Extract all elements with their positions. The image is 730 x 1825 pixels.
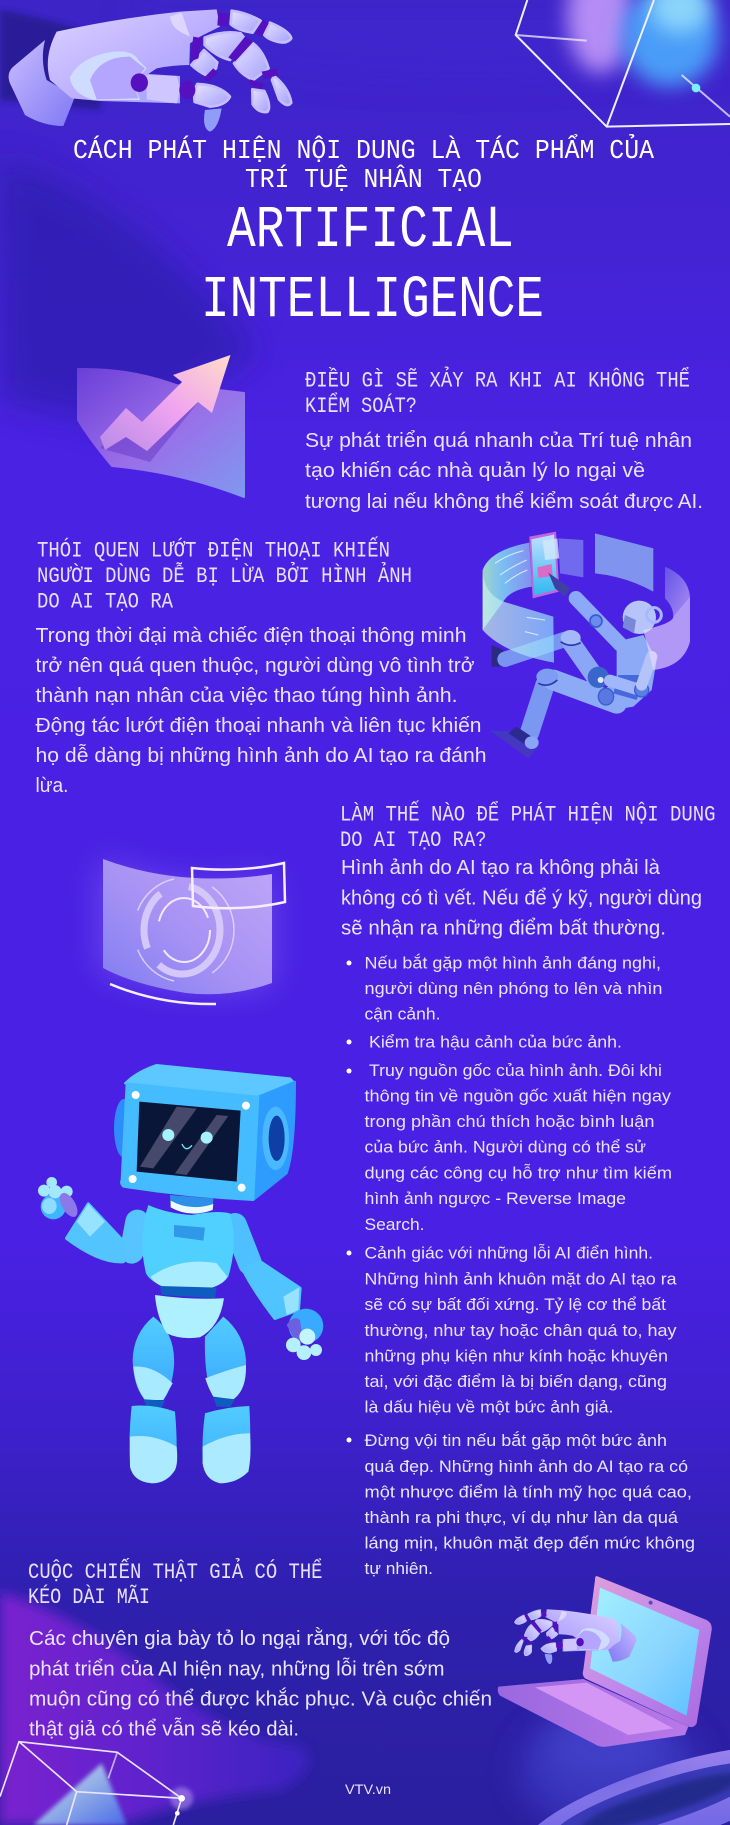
heading: DO AI TẠO RA: [37, 590, 174, 614]
bullet 3: Truy nguồn gốc của hình ảnh. Đôi khi: [369, 1062, 662, 1080]
bullet 5: thành ra phi thực, ví dụ như làn da quá: [364, 1509, 679, 1527]
text block: thật giả có thể vẫn sẽ kéo dài.: [29, 1718, 299, 1740]
icon: rising chart panel: [78, 355, 244, 497]
heading: [340, 800, 716, 853]
bullet 3: hình ảnh ngược - Reverse Image: [364, 1190, 626, 1208]
text block: Sự phát triển quá nhanh của Trí tuệ nhân: [305, 430, 692, 452]
bullet 1: [346, 954, 662, 1024]
text block: Hình ảnh do AI tạo ra không phải là: [341, 857, 661, 879]
icon: holographic screen with rings: [100, 859, 285, 1004]
section: how to detect AI content: [340, 800, 716, 1578]
bullet 2: Kiểm tra hậu cảnh của bức ảnh.: [369, 1034, 622, 1052]
text block: [305, 430, 703, 513]
bullet 4: sẽ có sự bất đối xứng. Tỷ lệ cơ thể bất: [364, 1296, 666, 1314]
text block: họ dễ dàng bị những hình ảnh do AI tạo ra đánh: [36, 744, 486, 767]
text block: trở nên quá quen thuộc, người dùng vô tình trở: [36, 655, 475, 677]
text block: tạo khiến các nhà quản lý lo ngại về: [305, 460, 645, 482]
heading: [305, 366, 690, 419]
bullet 3: dụng các công cụ hỗ trợ như tìm kiếm: [364, 1164, 672, 1182]
heading: KIỂM SOÁT?: [305, 392, 417, 419]
bullet 5: [346, 1431, 695, 1578]
bullet list: [346, 954, 695, 1578]
bullet 4: tai, với đặc điểm là bị biến dạng, cũng: [364, 1373, 667, 1391]
section: endless war of real and fake: [28, 1558, 492, 1740]
section: phone scrolling habit: [36, 536, 486, 797]
bullet 1: Nếu bắt gặp một hình ảnh đáng nghi,: [364, 954, 661, 972]
heading: [28, 1558, 322, 1610]
bullet 5: Đừng vội tin nếu bắt gặp một bức ảnh: [364, 1431, 667, 1450]
title: INTELLIGENCE: [201, 267, 544, 334]
decoration: purple ring bottom right: [511, 1723, 730, 1825]
icon: robot hand from screen: [515, 1609, 636, 1664]
section: what happens if AI goes out of control: [305, 366, 703, 513]
title: TRÍ TUỆ NHÂN TẠO: [245, 164, 482, 196]
decoration: crystal bottom left: [0, 1742, 193, 1825]
icon: seated robot with holographic ring: [483, 532, 690, 758]
bullet 3: thông tin về nguồn gốc xuất hiện ngay: [364, 1088, 672, 1106]
heading: KÉO DÀI MÃI: [28, 1584, 150, 1610]
bullet 1: cận cảnh.: [364, 1006, 440, 1024]
bullet 5: quá đẹp. Những hình ảnh do AI tạo ra có: [364, 1458, 688, 1476]
text block: sẽ nhận ra những điểm bất thường.: [341, 918, 666, 940]
bullet 3: trong phần chú thích hoặc bình luận: [364, 1113, 654, 1131]
text block: Động tác lướt điện thoại nhanh và liên tục khiến: [36, 715, 482, 737]
bullet 4: Cảnh giác với những lỗi AI điển hình.: [364, 1244, 653, 1262]
bullet 4: những phụ kiện như kính hoặc khuyên: [364, 1348, 668, 1366]
bullet 5: láng mịn, khuôn mặt đẹp đến mức không: [364, 1534, 695, 1552]
icon: laptop with robot hand: [498, 1576, 712, 1780]
bullet 4: thường, như tay hoặc chân quá to, hay: [364, 1322, 677, 1340]
bullet 4: là dấu hiệu về một bức ảnh giả.: [364, 1398, 614, 1416]
text block: [36, 625, 486, 797]
heading: THÓI QUEN LƯỚT ĐIỆN THOẠI KHIẾN: [37, 536, 390, 564]
heading: [37, 536, 412, 614]
bullet 5: tự nhiên.: [364, 1560, 433, 1578]
text block: thành nạn nhân của việc thao túng hình ảnh.: [36, 685, 458, 707]
text block: Trong thời đại mà chiếc điện thoại thông minh: [36, 625, 466, 647]
source credit: VTV.vn: [345, 1781, 391, 1797]
heading: DO AI TẠO RA?: [340, 828, 486, 853]
bullet 3: của bức ảnh. Người dùng có thể sử: [364, 1138, 646, 1156]
bullet 5: một nhược điểm là tính mỹ học quá cao,: [364, 1484, 692, 1502]
text block: không có tì vết. Nếu để ý kỹ, người dùng: [341, 888, 702, 910]
bullet 3: [346, 1062, 672, 1234]
bullet 3: Search.: [364, 1216, 424, 1234]
text block: muộn cũng có thể được khắc phục. Và cuộc chiến: [29, 1688, 492, 1710]
text block: lừa.: [36, 775, 68, 797]
text block: Các chuyên gia bày tỏ lo ngại rằng, với tốc độ: [29, 1627, 450, 1650]
text block: phát triển của AI hiện nay, những lỗi trên sớm: [29, 1658, 445, 1680]
icon: robot hand top left: [9, 9, 291, 132]
bullet 4: [346, 1244, 677, 1416]
title: CÁCH PHÁT HIỆN NỘI DUNG LÀ TÁC PHẨM CỦA: [73, 132, 655, 167]
heading: NGƯỜI DÙNG DỄ BỊ LỪA BỞI HÌNH ẢNH: [37, 561, 412, 589]
text block: [29, 1627, 492, 1740]
decoration: glowing crystal top right: [516, 0, 730, 127]
text block: tương lai nếu không thể kiểm soát được AI.: [305, 491, 703, 513]
bullet 4: Những hình ảnh khuôn mặt do AI tạo ra: [364, 1270, 677, 1288]
icon: blue robot: [38, 1065, 323, 1483]
title: [73, 132, 655, 334]
title: ARTIFICIAL: [227, 197, 514, 264]
heading: CUỘC CHIẾN THẬT GIẢ CÓ THỂ: [28, 1558, 322, 1585]
bullet 1: người dùng nên phóng to lên và nhìn: [364, 980, 662, 998]
text block: [341, 857, 702, 940]
